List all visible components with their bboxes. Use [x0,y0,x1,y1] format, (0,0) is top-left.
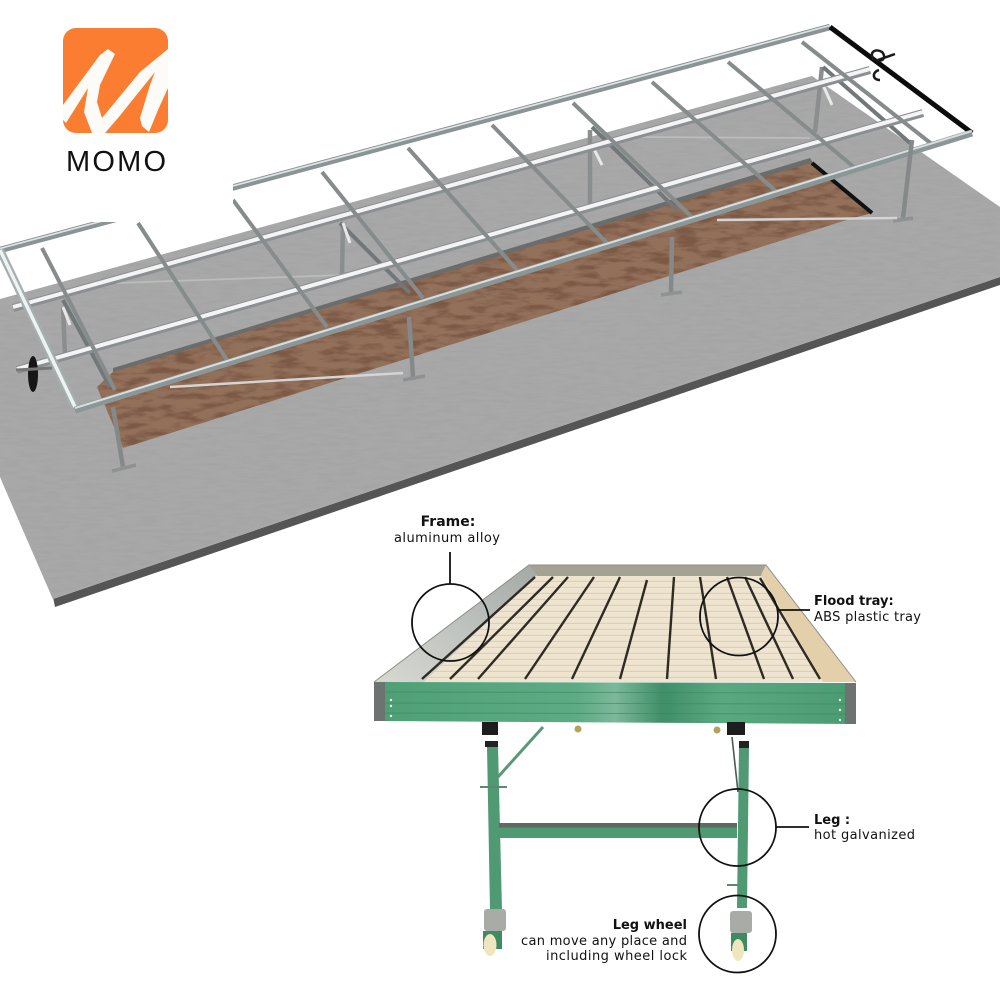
tray surface [374,565,856,682]
callout: flood tray: Flood tray: [814,594,894,609]
outer frame rails [0,26,972,410]
callout: flood tray [700,578,921,656]
logo wordmark: MOMO [66,146,166,178]
concrete slab [0,60,1000,610]
callout: leg wheel: Leg wheel [613,918,687,933]
callout: frame: aluminum alloy [394,531,500,546]
long support tubes [13,69,923,370]
callout: leg: Leg : [814,813,850,828]
callout: flood tray: ABS plastic tray [814,610,921,625]
left hand wheel [16,356,52,392]
flood table photo [374,565,856,961]
tray channels [422,577,820,679]
callout: frame: Frame: [421,514,475,530]
callout: leg wheel: including wheel lock [546,949,687,964]
callout: leg: hot galvanized [814,828,915,843]
front rail [374,682,856,724]
logo [63,28,168,178]
callout: frame [394,514,500,661]
near legs and braces [112,140,913,471]
illustration: raised bench frame on concrete slab [0,26,1000,610]
callout: leg [699,789,915,866]
callout: leg wheel: can move any place and [521,934,687,949]
left caster [483,909,506,956]
right hand wheel [872,50,895,80]
logo mark [63,28,168,133]
frame cross bars [42,42,933,390]
far posts [63,67,910,387]
legs [480,722,749,910]
soil trench [90,150,880,455]
right caster [730,911,752,961]
white logo background block [0,0,233,222]
callout: leg wheel [521,896,776,972]
